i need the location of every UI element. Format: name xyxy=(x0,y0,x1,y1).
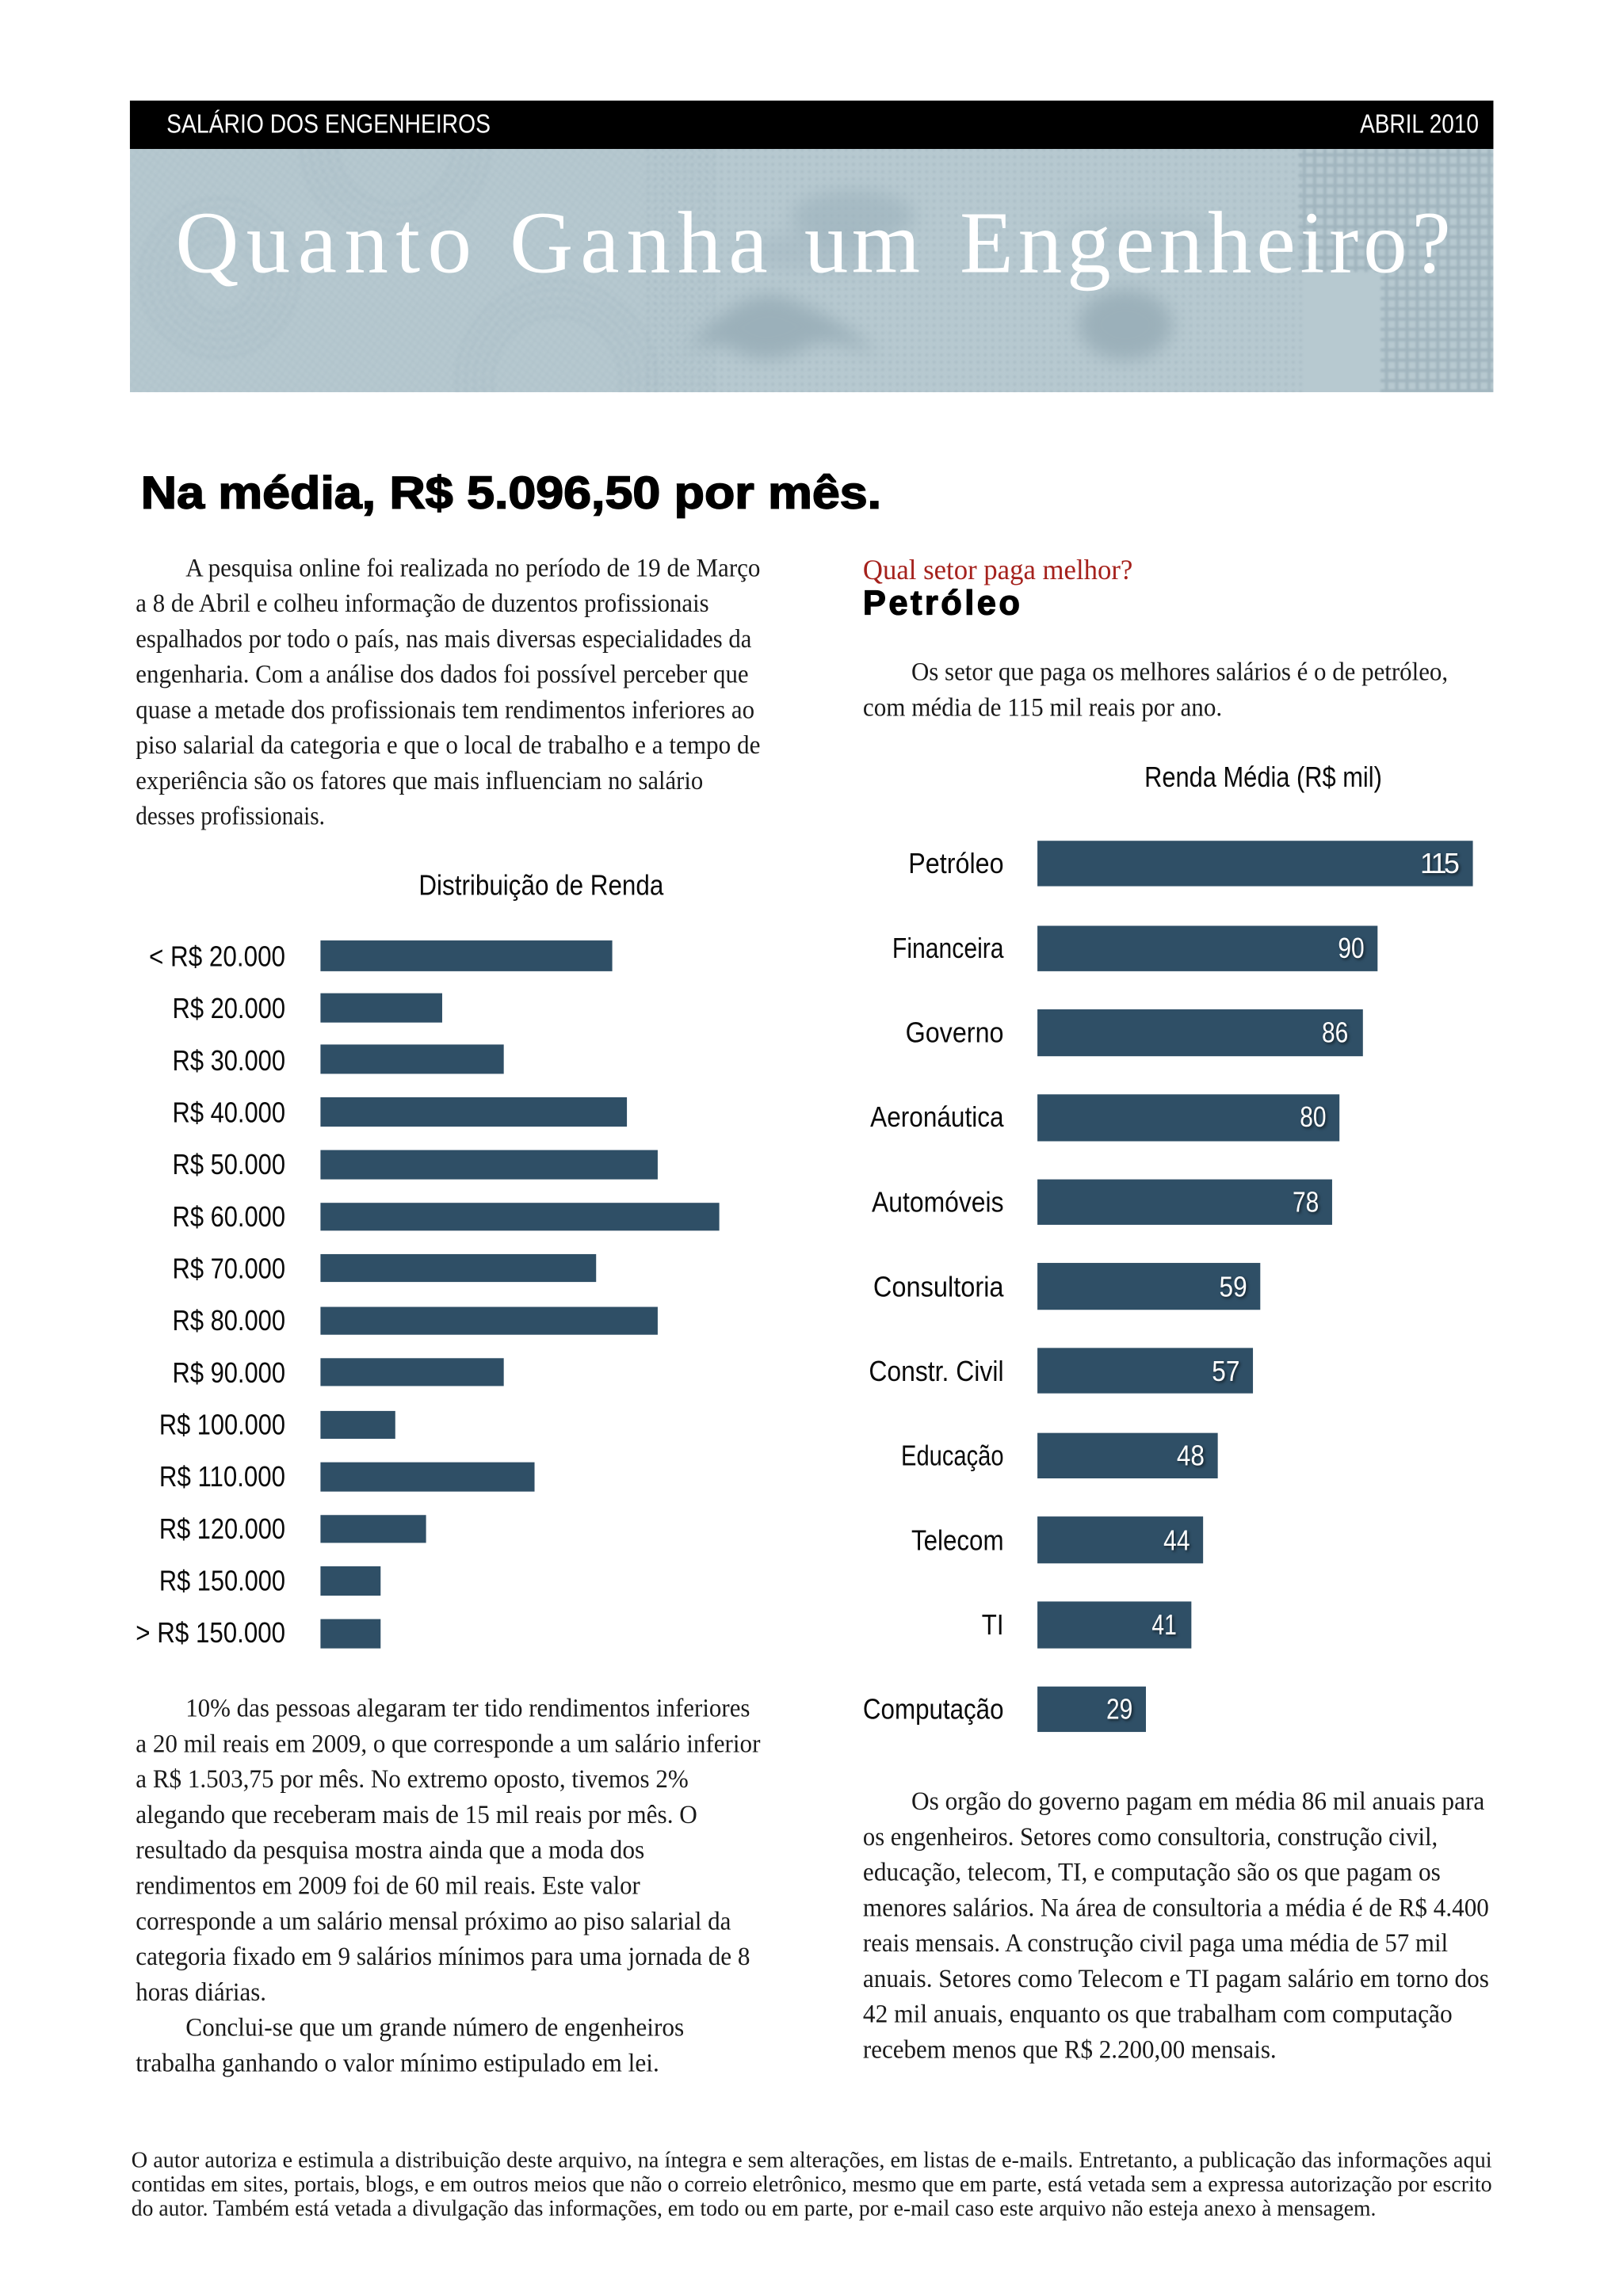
left lower paragraph: Conclui-se que um grande número de engenheiros xyxy=(185,2014,684,2042)
right lower paragraph: anuais. Setores como Telecom e TI pagam salário em torno dos xyxy=(863,1965,1489,1993)
right intro paragraph: com média de 115 mil reais por ano. xyxy=(863,693,1222,722)
right chart values: 86 xyxy=(1322,1016,1348,1049)
intro paragraph: desses profissionais. xyxy=(136,803,325,831)
right column answer heading: Petróleo xyxy=(863,584,1020,622)
intro paragraph: A pesquisa online foi realizada no período de 19 de Março xyxy=(185,554,760,582)
left chart: Distribuição de Renda xyxy=(136,869,720,1649)
right chart: Renda Média xyxy=(863,761,1473,1732)
right chart labels: Aeronáutica xyxy=(870,1100,1004,1133)
left lower paragraph: rendimentos em 2009 foi de 60 mil reais. Este valor xyxy=(136,1871,640,1900)
left chart title: Distribuição de Renda xyxy=(418,869,664,902)
left chart labels: R$ 40.000 xyxy=(173,1096,285,1128)
left chart labels xyxy=(136,940,285,1649)
intro paragraph: piso salarial da categoria e que o local de trabalho e a tempo de xyxy=(136,731,760,760)
right chart labels: Financeira xyxy=(892,932,1004,964)
left chart labels: R$ 60.000 xyxy=(173,1200,285,1233)
right chart values: 78 xyxy=(1293,1185,1319,1218)
right lower paragraph: 42 mil anuais, enquanto os que trabalham com computação xyxy=(863,2000,1453,2029)
left chart labels: R$ 120.000 xyxy=(159,1512,285,1545)
right lower paragraph xyxy=(863,1787,1489,2065)
right chart labels: Petróleo xyxy=(908,847,1004,879)
right chart values: 41 xyxy=(1151,1608,1177,1641)
right chart labels: Governo xyxy=(906,1016,1004,1049)
right chart values: 57 xyxy=(1212,1355,1239,1387)
left lower paragraph xyxy=(136,1695,761,2077)
header bar xyxy=(130,101,1493,149)
left chart labels: R$ 100.000 xyxy=(159,1408,285,1440)
left lower paragraph: horas diárias. xyxy=(136,1978,266,2007)
footer disclaimer: O autor autoriza e estimula a distribuição deste arquivo, na íntegra e sem alterações, em listas de e-mails. Entretanto, a publicação das informações aqui xyxy=(132,2149,1492,2173)
right chart values: 48 xyxy=(1177,1439,1205,1471)
title: Quanto xyxy=(175,194,472,292)
left chart labels: R$ 20.000 xyxy=(173,992,285,1024)
left chart labels: < R$ 20.000 xyxy=(149,940,285,972)
header date: ABRIL 2010 xyxy=(1360,110,1479,139)
left chart labels: R$ 70.000 xyxy=(173,1252,285,1284)
left lower paragraph: trabalha ganhando o valor mínimo estipulado em lei. xyxy=(136,2049,659,2077)
right lower paragraph: recebem menos que R$ 2.200,00 mensais. xyxy=(863,2036,1277,2065)
left lower paragraph: alegando que receberam mais de 15 mil reais por mês. O xyxy=(136,1801,697,1829)
intro paragraph: a 8 de Abril e colheu informação de duzentos profissionais xyxy=(136,589,709,618)
right chart bars xyxy=(1037,841,1473,1732)
right chart labels: Computação xyxy=(863,1692,1004,1725)
left lower paragraph: a R$ 1.503,75 por mês. No extremo oposto, tivemos 2% xyxy=(136,1765,689,1794)
right chart labels: Automóveis xyxy=(872,1185,1004,1218)
intro paragraph: experiência são os fatores que mais influenciam no salário xyxy=(136,767,703,795)
left chart labels: R$ 80.000 xyxy=(173,1304,285,1337)
right chart values xyxy=(1106,847,1460,1725)
left chart labels: > R$ 150.000 xyxy=(136,1616,285,1649)
left lower paragraph: categoria fixado em 9 salários mínimos para uma jornada de 8 xyxy=(136,1943,750,1971)
right chart labels: Constr. Civil xyxy=(869,1355,1004,1387)
left chart labels: R$ 30.000 xyxy=(173,1044,285,1077)
intro paragraph xyxy=(136,554,760,831)
footer disclaimer xyxy=(132,2149,1492,2222)
title: um xyxy=(804,194,920,292)
right intro paragraph: Os setor que paga os melhores salários é o de petróleo, xyxy=(911,658,1448,687)
right lower paragraph: menores salários. Na área de consultoria a média é de R$ 4.400 xyxy=(863,1894,1489,1922)
right intro paragraph xyxy=(863,658,1448,722)
left chart labels: R$ 90.000 xyxy=(173,1356,285,1389)
right lower paragraph: os engenheiros. Setores como consultoria, construção civil, xyxy=(863,1823,1438,1852)
right chart title: Renda Média (R$ mil) xyxy=(1144,761,1382,793)
footer disclaimer: contidas em sites, portais, blogs, e em outros meios que não o correio eletrônico, mesmo que em parte, está vetada sem a expressa autorização por escrito xyxy=(132,2172,1492,2197)
header left label: SALÁRIO DOS ENGENHEIROS xyxy=(166,110,491,139)
footer disclaimer: do autor. Também está vetada a divulgação das informações, em todo ou em parte, por e-mail caso este arquivo não esteja anexo à mensagem. xyxy=(132,2197,1376,2222)
left chart labels: R$ 50.000 xyxy=(173,1148,285,1180)
intro paragraph: engenharia. Com a análise dos dados foi possível perceber que xyxy=(136,661,749,689)
left lower paragraph: resultado da pesquisa mostra ainda que a moda dos xyxy=(136,1836,644,1865)
title xyxy=(175,194,1451,292)
right chart labels: Telecom xyxy=(911,1524,1004,1557)
intro paragraph: espalhados por todo o país, nas mais diversas especialidades da xyxy=(136,625,751,654)
left chart labels: R$ 110.000 xyxy=(159,1460,285,1493)
right chart values: 115 xyxy=(1420,847,1460,879)
intro paragraph: quase a metade dos profissionais tem rendimentos inferiores ao xyxy=(136,696,754,724)
right lower paragraph: reais mensais. A construção civil paga uma média de 57 mil xyxy=(863,1929,1448,1958)
right chart values: 29 xyxy=(1106,1692,1132,1725)
banner: engraved banknote background xyxy=(130,149,1493,393)
right chart values: 80 xyxy=(1300,1100,1327,1133)
right chart labels: Educação xyxy=(901,1439,1004,1471)
right chart values: 59 xyxy=(1219,1271,1247,1303)
right column question: Qual setor paga melhor? xyxy=(863,554,1132,585)
left chart bars xyxy=(320,940,720,1649)
right chart labels: Consultoria xyxy=(873,1271,1004,1303)
right chart labels: TI xyxy=(982,1608,1004,1641)
subtitle: average salary: Na média, R$ 5.096,50 por mês. xyxy=(141,467,881,518)
left lower paragraph: a 20 mil reais em 2009, o que corresponde a um salário inferior xyxy=(136,1730,761,1758)
left lower paragraph: corresponde a um salário mensal próximo ao piso salarial da xyxy=(136,1907,731,1936)
title: Engenheiro? xyxy=(960,194,1451,292)
right chart labels xyxy=(863,847,1004,1725)
left lower paragraph: 10% das pessoas alegaram ter tido rendimentos inferiores xyxy=(185,1695,750,1723)
right chart values: 90 xyxy=(1338,932,1365,964)
right lower paragraph: Os orgão do governo pagam em média 86 mil anuais para xyxy=(911,1787,1484,1816)
title: Ganha xyxy=(510,194,768,292)
right lower paragraph: educação, telecom, TI, e computação são os que pagam os xyxy=(863,1859,1441,1887)
right chart values: 44 xyxy=(1163,1524,1190,1557)
left chart labels: R$ 150.000 xyxy=(159,1565,285,1597)
